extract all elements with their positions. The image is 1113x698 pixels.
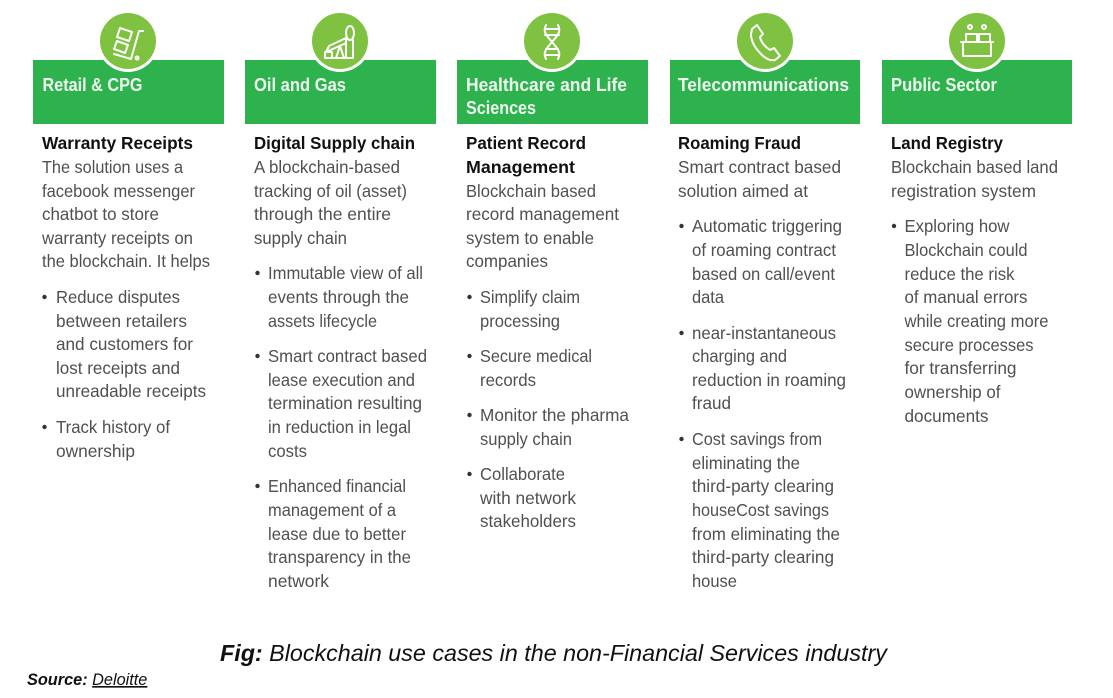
bullets: Land Registry: secure processes	[904, 335, 1034, 355]
bullets: Digital Supply chain	[255, 263, 427, 591]
bullets: Digital Supply chain: assets lifecycle	[268, 311, 377, 331]
text: Patient Record Management: record management	[466, 204, 619, 224]
bullets: Digital Supply chain: events through the	[268, 287, 409, 307]
bullets: Patient Record Management: with network	[479, 488, 576, 508]
bullets: Patient Record Management: Secure medical	[480, 346, 592, 366]
bullets: Land Registry: Blockchain could	[904, 240, 1028, 260]
bullets: Roaming Fraud: house	[692, 571, 737, 591]
bullets: Digital Supply chain: Immutable view of all	[268, 263, 423, 283]
text: Patient Record Management	[466, 133, 619, 271]
bullets: Digital Supply chain: network	[268, 571, 329, 591]
bullets: Roaming Fraud: fraud	[692, 393, 731, 413]
header band: Healthcare and Life Sciences: Sciences	[466, 98, 536, 118]
bullets: Roaming Fraud	[679, 216, 846, 591]
bullets: Digital Supply chain: management of a	[268, 500, 396, 520]
header band: Oil and Gas	[245, 10, 436, 124]
text: Warranty Receipts: facebook messenger	[42, 181, 195, 201]
bullets: Roaming Fraud: eliminating the	[692, 453, 800, 473]
bullets: Roaming Fraud: charging and	[692, 346, 787, 366]
icon: DNA helix	[545, 25, 559, 59]
panel: Public Sector	[882, 10, 1072, 426]
text: Warranty Receipts: Warranty Receipts	[42, 133, 193, 153]
bullets: Roaming Fraud: Cost savings from	[692, 429, 822, 449]
text: Warranty Receipts: the blockchain. It helps	[42, 251, 210, 271]
text: Patient Record Management: Patient Record	[466, 133, 586, 153]
bullets: Patient Record Management: stakeholders	[480, 511, 576, 531]
bullets: Warranty Receipts: and customers for	[56, 334, 193, 354]
bullets: Patient Record Management: processing	[480, 311, 560, 331]
bullets: Digital Supply chain: lease due to better	[268, 524, 406, 544]
panel: Healthcare and Life Sciences	[457, 10, 648, 531]
bullets: Digital Supply chain: termination resulting	[268, 393, 422, 413]
text: Roaming Fraud: Roaming Fraud	[678, 133, 801, 153]
bullets: Patient Record Management: Collaborate	[480, 464, 565, 484]
header band: Telecommunications	[670, 10, 860, 124]
bullets: Land Registry: for transferring	[904, 358, 1016, 378]
bullets: Patient Record Management: supply chain	[480, 429, 572, 449]
bullets: Patient Record Management: Simplify claim	[480, 287, 580, 307]
bullets: Warranty Receipts: between retailers	[56, 311, 187, 331]
text: Land Registry: registration system	[891, 181, 1036, 201]
bullets: Land Registry: Exploring how	[904, 216, 1010, 236]
bullets: Roaming Fraud: Automatic triggering	[692, 216, 842, 236]
bullets: Roaming Fraud: reduction in roaming	[692, 370, 846, 390]
text: Roaming Fraud: Smart contract based	[678, 157, 841, 177]
text: Land Registry: Blockchain based land	[891, 157, 1058, 177]
bullets: Roaming Fraud: near-instantaneous	[692, 323, 836, 343]
panel: Telecommunications	[670, 10, 860, 591]
text: Warranty Receipts: warranty receipts on	[41, 228, 193, 248]
bullets: Warranty Receipts	[42, 287, 206, 461]
header band: Oil and Gas: Oil and Gas	[254, 75, 346, 95]
bullets: Roaming Fraud: houseCost savings	[692, 500, 829, 520]
bullets: Roaming Fraud: based on call/event	[692, 264, 835, 284]
text: Warranty Receipts	[41, 133, 210, 271]
bullets: Land Registry: reduce the risk	[904, 264, 1015, 284]
bullets: Land Registry: while creating more	[904, 311, 1048, 331]
panel: Retail & CPG	[33, 10, 224, 461]
text: Patient Record Management: Management	[466, 157, 575, 177]
bullets: Roaming Fraud: of roaming contract	[692, 240, 836, 260]
text: Digital Supply chain: Digital Supply chain	[254, 133, 415, 153]
bullets: Digital Supply chain: transparency in the	[268, 547, 411, 567]
header band: Public Sector	[882, 10, 1072, 124]
bullets: Land Registry: ownership of	[904, 382, 1001, 402]
text: Warranty Receipts: chatbot to store	[42, 204, 159, 224]
text: Patient Record Management: system to enable	[466, 228, 594, 248]
bullets: Warranty Receipts: Reduce disputes	[56, 287, 180, 307]
header band: Retail & CPG	[33, 10, 224, 124]
text: Roaming Fraud	[678, 133, 841, 201]
icon: telephone handset	[751, 25, 780, 60]
bullets: Warranty Receipts: Track history of	[56, 417, 170, 437]
text: Warranty Receipts: The solution uses a	[42, 157, 183, 177]
text: Digital Supply chain: through the entire	[254, 204, 391, 224]
header band: Healthcare and Life Sciences: Healthcare and Life	[466, 75, 627, 95]
source line: Source: Deloitte	[27, 671, 147, 689]
bullets: Roaming Fraud: third-party clearing	[692, 547, 834, 567]
bullets: Land Registry: documents	[904, 406, 989, 426]
bullets: Land Registry: of manual errors	[904, 287, 1028, 307]
header band: Telecommunications: Telecommunications	[678, 75, 849, 95]
bullets: Roaming Fraud: third-party clearing	[692, 476, 834, 496]
figure caption: Fig: Blockchain use cases in the non-Financial Services industry	[220, 640, 888, 666]
text: Digital Supply chain: A blockchain-based	[254, 157, 400, 177]
bullets: Digital Supply chain: Enhanced financial	[268, 476, 406, 496]
header band: Public Sector: Public Sector	[891, 75, 997, 95]
bullets: Patient Record Management	[467, 287, 629, 531]
bullets: Digital Supply chain: costs	[268, 441, 307, 461]
text: Digital Supply chain: supply chain	[254, 228, 347, 248]
icon: reception desk with two people	[961, 25, 993, 56]
text: Digital Supply chain: tracking of oil (asset)	[254, 181, 407, 201]
bullets: Digital Supply chain: Smart contract based	[268, 346, 427, 366]
text: Digital Supply chain	[254, 133, 415, 248]
bullets: Digital Supply chain: lease execution and	[268, 370, 415, 390]
bullets: Warranty Receipts: unreadable receipts	[56, 381, 206, 401]
bullets: Land Registry	[892, 216, 1048, 426]
bullets: Warranty Receipts: ownership	[56, 441, 135, 461]
bullets: Digital Supply chain: in reduction in legal	[268, 417, 411, 437]
header band: Retail & CPG: Retail & CPG	[42, 75, 142, 95]
text: Roaming Fraud: solution aimed at	[678, 181, 808, 201]
bullets: Roaming Fraud: data	[692, 287, 724, 307]
text: Land Registry	[891, 133, 1058, 201]
bullets: Warranty Receipts: lost receipts and	[56, 358, 180, 378]
header band: Healthcare and Life Sciences	[457, 10, 648, 124]
text: Patient Record Management: Blockchain based	[466, 181, 596, 201]
text: Land Registry: Land Registry	[891, 133, 1003, 153]
bullets: Roaming Fraud: from eliminating the	[692, 524, 840, 544]
bullets: Patient Record Management: Monitor the pharma	[480, 405, 629, 425]
icon: oil pumpjack	[325, 26, 354, 58]
panel: Oil and Gas	[245, 10, 436, 591]
bullets: Patient Record Management: records	[480, 370, 536, 390]
icon: hand truck with boxes	[114, 28, 143, 60]
text: Patient Record Management: companies	[466, 251, 548, 271]
